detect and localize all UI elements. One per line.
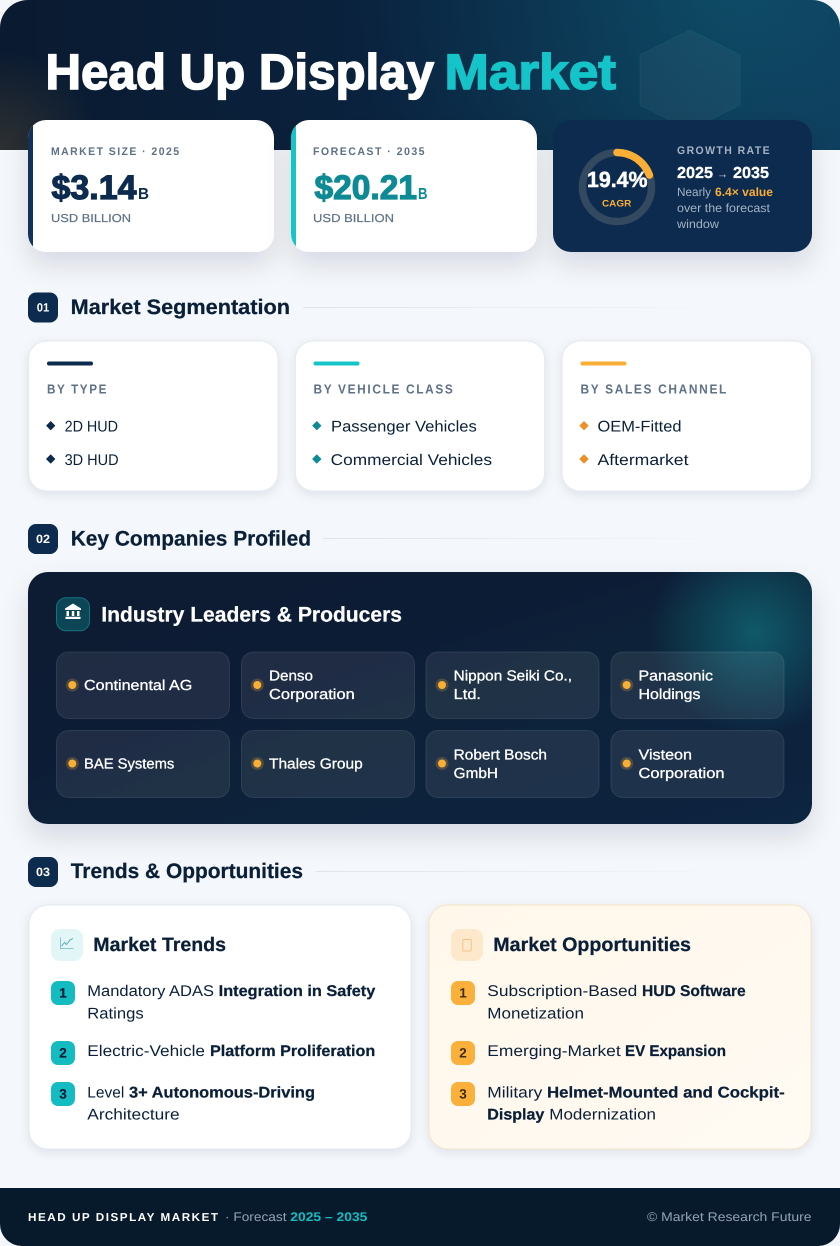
decorative hexagon bbox=[640, 30, 740, 130]
panel: segmentation by sales channel: BY SALES CHANNEL bbox=[580, 382, 728, 396]
KPI card: market size 2025: $3.14 bbox=[52, 169, 137, 207]
trend 2: Platform Proliferation bbox=[210, 1043, 375, 1060]
company: Panasonic Holdings: Panasonic bbox=[638, 669, 713, 685]
panel: key companies bbox=[28, 572, 812, 824]
panel heading: Market Trends bbox=[93, 934, 226, 956]
opportunity 3: Military bbox=[487, 1084, 543, 1101]
company: Continental AG: Continental AG bbox=[84, 678, 192, 694]
section heading 03: 03 bbox=[36, 865, 50, 879]
trend 1: Integration in Safety bbox=[219, 983, 376, 1000]
icon: missing-glyph box bbox=[451, 929, 483, 961]
opportunity 3: 3 bbox=[459, 1086, 467, 1102]
growth rate text bbox=[676, 145, 773, 231]
company: Panasonic Holdings: Holdings bbox=[638, 687, 700, 703]
section heading 01 bbox=[28, 292, 740, 322]
panel: segmentation by type: BY TYPE bbox=[47, 382, 108, 396]
opportunity 1: HUD Software bbox=[642, 983, 746, 1000]
company: Nippon Seiki: Ltd. bbox=[454, 687, 481, 703]
growth rate text: 2035 bbox=[733, 165, 769, 182]
title: Head Up Display bbox=[46, 44, 434, 100]
title bbox=[46, 44, 616, 100]
panel heading: Market Opportunities bbox=[493, 934, 691, 956]
donut gauge 19.4% bbox=[582, 152, 652, 222]
footer: HEAD UP DISPLAY MARKET bbox=[28, 1212, 220, 1224]
footer bbox=[0, 1188, 840, 1246]
panel: segmentation by type: 2D HUD bbox=[65, 418, 118, 436]
opportunity 2 bbox=[451, 1041, 726, 1065]
growth rate text: GROWTH RATE bbox=[677, 145, 771, 157]
company: Nippon Seiki bbox=[426, 652, 599, 718]
company: Robert Bosch GmbH bbox=[426, 730, 599, 798]
growth rate text: over the forecast bbox=[677, 201, 771, 215]
opportunity 2: 2 bbox=[459, 1046, 467, 1060]
opportunity 1: Monetization bbox=[487, 1005, 584, 1022]
icon: line chart bbox=[51, 929, 83, 961]
KPI card: forecast 2035: FORECAST · 2035 bbox=[313, 146, 426, 158]
KPI card: forecast 2035: USD BILLION bbox=[313, 213, 394, 225]
company: Nippon Seiki: Nippon Seiki Co., bbox=[454, 669, 572, 685]
company: Robert Bosch GmbH: Robert Bosch bbox=[454, 747, 547, 763]
footer: © Market Research Future bbox=[647, 1210, 812, 1224]
company: Thales Group: Thales Group bbox=[269, 757, 363, 773]
trend 1: Ratings bbox=[87, 1005, 144, 1022]
panel: segmentation by type: 3D HUD bbox=[65, 452, 119, 469]
company: Visteon Corporation: Corporation bbox=[638, 766, 724, 782]
donut gauge 19.4%: 19.4% bbox=[587, 167, 648, 192]
icon: institution bbox=[56, 598, 90, 631]
KPI card: forecast 2035 bbox=[291, 120, 537, 252]
donut gauge 19.4%: CAGR bbox=[602, 199, 631, 210]
company: BAE Systems bbox=[56, 730, 230, 798]
KPI card: forecast 2035: B bbox=[418, 186, 428, 203]
section heading 01: 01 bbox=[37, 301, 50, 315]
trend 2: Electric-Vehicle bbox=[87, 1043, 205, 1060]
trend 1: Mandatory ADAS bbox=[87, 983, 214, 1000]
opportunity 2: Emerging-Market bbox=[487, 1043, 621, 1060]
KPI card: market size 2025: MARKET SIZE · 2025 bbox=[51, 146, 180, 158]
panel: market opportunities bbox=[429, 905, 811, 1149]
footer: 2025 – 2035 bbox=[290, 1210, 367, 1224]
trend 1: 1 bbox=[59, 986, 67, 1000]
section heading 03 bbox=[28, 857, 740, 887]
section heading 02: 02 bbox=[36, 532, 50, 546]
trend 3: Architecture bbox=[87, 1106, 180, 1123]
section heading 03: Trends & Opportunities bbox=[71, 860, 303, 883]
trend 3: 3+ Autonomous-Driving bbox=[129, 1084, 315, 1101]
trend 3 bbox=[51, 1082, 315, 1123]
KPI card: market size 2025: USD BILLION bbox=[51, 213, 131, 225]
panel: market trends bbox=[29, 905, 411, 1149]
growth rate text: 2025 bbox=[677, 165, 713, 182]
KPI card: CAGR growth rate bbox=[553, 120, 812, 252]
opportunity 1: 1 bbox=[459, 986, 467, 1000]
company: Continental AG bbox=[56, 652, 230, 718]
trend 2 bbox=[51, 1041, 375, 1065]
company: Denso Corporation: Denso bbox=[269, 669, 313, 685]
panel: segmentation by sales channel: Aftermarket bbox=[598, 452, 689, 469]
KPI card: market size 2025: B bbox=[138, 186, 149, 203]
growth rate text: window bbox=[676, 217, 719, 231]
trend 3: Level bbox=[87, 1084, 124, 1101]
section heading 02 bbox=[28, 524, 740, 554]
growth rate text: 6.4× value bbox=[715, 185, 773, 199]
company: Denso Corporation bbox=[242, 652, 414, 718]
opportunity 1 bbox=[451, 981, 746, 1022]
company: Denso Corporation: Corporation bbox=[269, 687, 355, 703]
opportunity 3 bbox=[451, 1082, 785, 1123]
company: Visteon Corporation: Visteon bbox=[638, 747, 692, 763]
opportunity 3: Helmet-Mounted and Cockpit- bbox=[547, 1084, 785, 1101]
KPI card: market size 2025 bbox=[28, 120, 274, 252]
trend 1 bbox=[51, 981, 376, 1022]
company: Panasonic Holdings bbox=[611, 652, 784, 718]
panel: segmentation by vehicle class: Commercial Vehicles bbox=[331, 452, 492, 469]
trend 2: 2 bbox=[59, 1046, 67, 1060]
panel: segmentation by vehicle class: Passenger Vehicles bbox=[331, 418, 477, 436]
company: Visteon Corporation bbox=[611, 730, 784, 798]
panel: segmentation by vehicle class: BY VEHICLE CLASS bbox=[314, 382, 454, 396]
growth rate text: → bbox=[717, 166, 728, 181]
section heading 02: Key Companies Profiled bbox=[71, 528, 311, 550]
footer: · Forecast bbox=[225, 1210, 287, 1224]
section heading 01: Market Segmentation bbox=[71, 296, 290, 319]
company: Robert Bosch GmbH: GmbH bbox=[454, 766, 498, 782]
panel heading: Industry Leaders & Producers bbox=[101, 604, 402, 627]
company: Thales Group bbox=[242, 730, 414, 798]
growth rate text: Nearly bbox=[677, 185, 711, 199]
panel: segmentation by vehicle class bbox=[295, 341, 545, 491]
opportunity 3: Display bbox=[487, 1106, 545, 1123]
company: BAE Systems: BAE Systems bbox=[84, 757, 174, 773]
KPI card: forecast 2035: $20.21 bbox=[314, 169, 417, 207]
trend 3: 3 bbox=[59, 1086, 67, 1102]
panel: segmentation by type bbox=[29, 341, 278, 491]
title: Market bbox=[444, 44, 616, 100]
panel: segmentation by sales channel bbox=[562, 341, 812, 491]
panel: segmentation by sales channel: OEM-Fitted bbox=[598, 418, 682, 436]
opportunity 1: Subscription-Based bbox=[487, 983, 637, 1000]
opportunity 2: EV Expansion bbox=[625, 1043, 726, 1060]
header band bbox=[0, 0, 840, 150]
opportunity 3: Modernization bbox=[549, 1106, 656, 1123]
